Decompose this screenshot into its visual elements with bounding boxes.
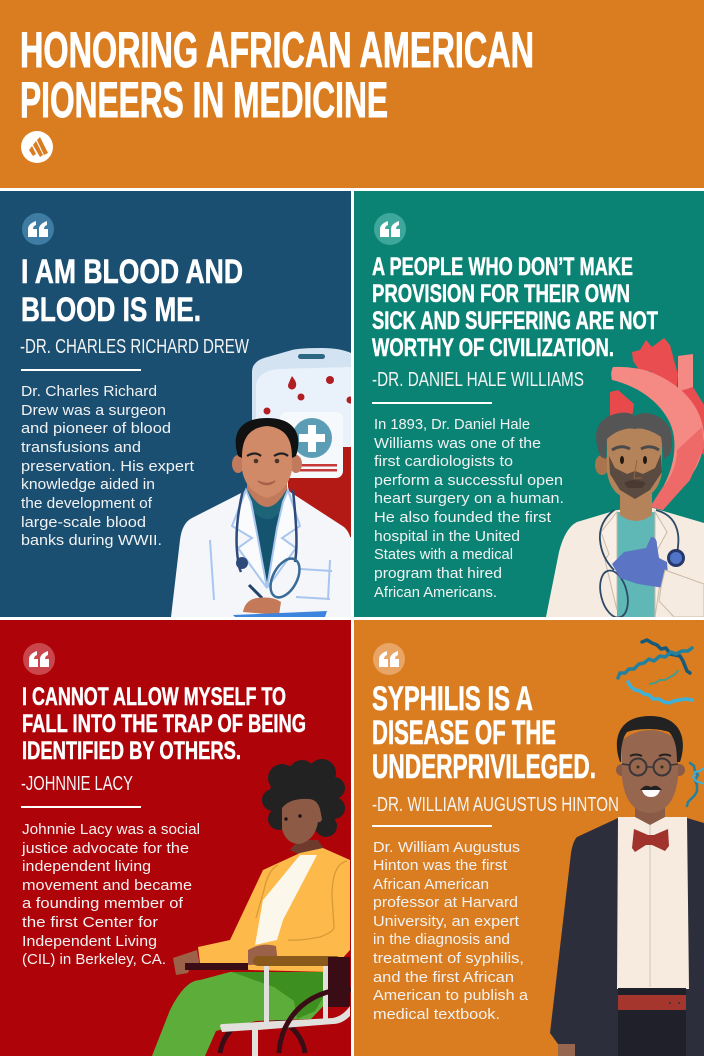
icon: quote mark — [373, 643, 405, 675]
quote heading: UNDERPRIVILEGED. — [372, 748, 596, 786]
quote heading — [22, 259, 242, 322]
biography text: hospital in the United — [374, 528, 520, 545]
panel: Daniel Hale Williams — [354, 191, 704, 620]
biography text: Drew was a surgeon — [21, 402, 166, 419]
attribution: -JOHNNIE LACY — [21, 772, 133, 795]
biography text: heart surgery on a human. — [374, 490, 564, 507]
title: PIONEERS IN MEDICINE — [20, 72, 388, 128]
biography text: and pioneer of blood — [21, 420, 171, 437]
biography text: preservation. His expert — [21, 458, 195, 475]
quote heading: FALL INTO THE TRAP OF BEING — [22, 710, 306, 738]
illustration: blood bag — [252, 348, 354, 543]
biography text: first cardiologists to — [374, 453, 513, 470]
icon: quote mark — [22, 213, 54, 245]
biography text: in the diagnosis and — [373, 931, 510, 948]
biography text: a founding member of — [22, 895, 184, 912]
biography text: University, an expert — [373, 913, 520, 930]
biography text: large-scale blood — [21, 514, 146, 531]
attribution: -DR. WILLIAM AUGUSTUS HINTON — [372, 793, 619, 816]
biography text: independent living — [22, 858, 151, 875]
biography text: perform a successful open — [374, 472, 563, 489]
quote heading: DISEASE OF THE — [372, 714, 556, 752]
attribution: -DR. CHARLES RICHARD DREW — [20, 335, 249, 358]
biography text: transfusions and — [21, 439, 141, 456]
illustration: Dr. Williams — [546, 413, 704, 620]
biography text: In 1893, Dr. Daniel Hale — [374, 416, 530, 433]
header panel — [0, 0, 704, 188]
biography text — [21, 383, 195, 549]
biography text: African American — [373, 876, 489, 893]
icon: quote mark — [374, 213, 406, 245]
biography text: medical textbook. — [373, 1006, 500, 1023]
panel: Johnnie Lacy — [0, 620, 351, 1056]
biography text: the first Center for — [22, 914, 158, 931]
biography text — [373, 839, 529, 1023]
biography text: Williams was one of the — [374, 435, 541, 452]
biography text: professor at Harvard — [373, 894, 518, 911]
biography text: the development of — [21, 495, 153, 512]
illustration: Dr. Hinton — [550, 716, 704, 1056]
illustration: heart — [610, 338, 704, 510]
biography text: (CIL) in Berkeley, CA. — [22, 951, 166, 968]
quote heading: WORTHY OF CIVILIZATION. — [372, 334, 614, 362]
quote heading — [372, 686, 595, 778]
biography text — [374, 416, 564, 601]
quote heading — [23, 687, 306, 760]
panel: William Augustus Hinton — [354, 620, 704, 1056]
quote heading: I AM BLOOD AND — [21, 253, 243, 291]
biography text: movement and became — [22, 877, 192, 894]
biography text: treatment of syphilis, — [373, 950, 524, 967]
biography text: program that hired — [374, 565, 502, 582]
biography text: Johnnie Lacy was a social — [22, 821, 200, 838]
icon: logo — [21, 131, 53, 163]
illustration: Johnnie Lacy in wheelchair — [152, 759, 351, 1056]
biography text: Hinton was the first — [373, 857, 508, 874]
illustration: Dr. Drew — [171, 418, 352, 617]
biography text: American to publish a — [373, 987, 529, 1004]
quote heading: I CANNOT ALLOW MYSELF TO — [22, 683, 286, 711]
biography text: banks during WWII. — [21, 532, 162, 549]
biography text: States with a medical — [374, 546, 513, 563]
icon: quote mark — [23, 643, 55, 675]
quote heading: IDENTIFIED BY OTHERS. — [22, 737, 241, 765]
quote heading: SYPHILIS IS A — [372, 680, 533, 718]
biography text: Independent Living — [22, 933, 157, 950]
title — [20, 22, 534, 128]
biography text: Dr. Charles Richard — [21, 383, 157, 400]
biography text: justice advocate for the — [21, 840, 189, 857]
biography text: He also founded the first — [374, 509, 552, 526]
biography text: knowledge aided in — [21, 476, 155, 493]
illustration: bacteria squiggles — [618, 640, 704, 806]
quote heading: BLOOD IS ME. — [21, 291, 201, 329]
attribution: -DR. DANIEL HALE WILLIAMS — [372, 368, 584, 391]
biography text: African Americans. — [374, 584, 497, 601]
quote heading — [372, 253, 658, 362]
panel: Charles Richard Drew — [0, 191, 354, 617]
biography text: Dr. William Augustus — [373, 839, 520, 856]
biography text: and the first African — [373, 969, 514, 986]
biography text — [21, 821, 200, 968]
